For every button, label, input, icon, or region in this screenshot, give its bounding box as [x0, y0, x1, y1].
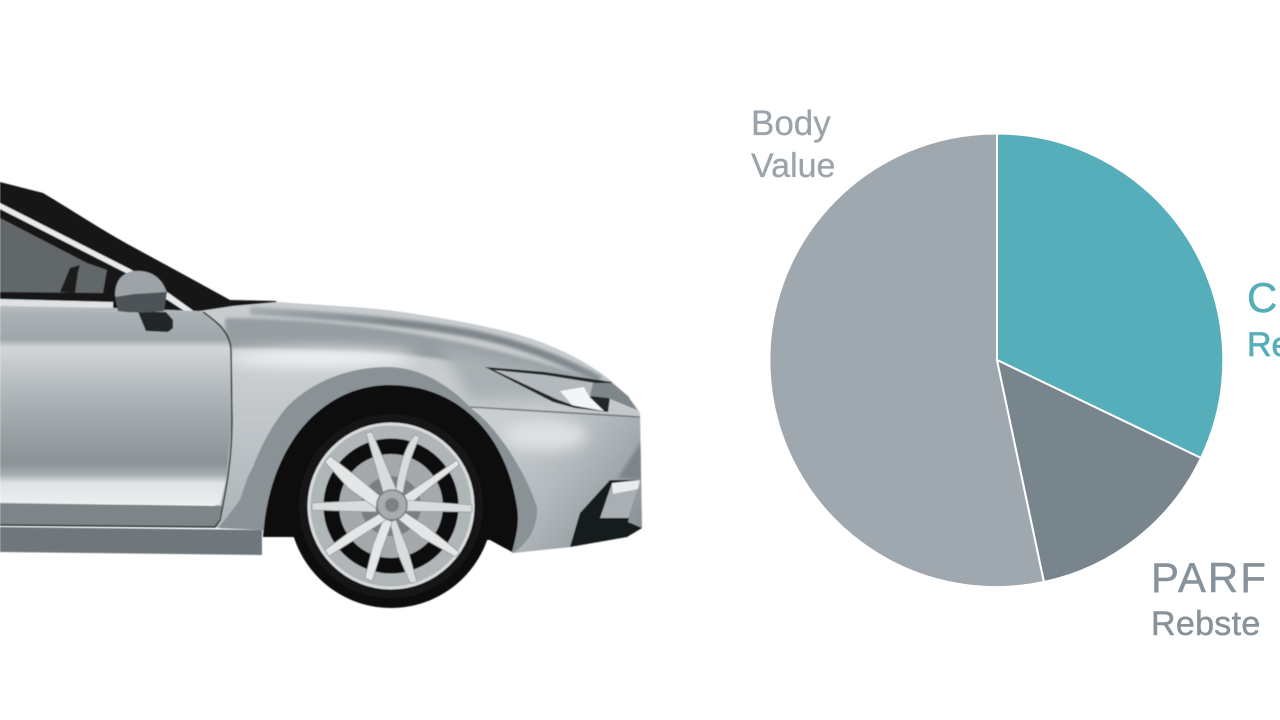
car illustration	[0, 182, 650, 608]
car: hood crease line	[470, 407, 640, 417]
car: roof and A-pillar	[0, 182, 277, 312]
label: body value: Body	[751, 104, 831, 143]
car: front wheel	[289, 404, 493, 608]
tyre	[289, 404, 493, 608]
car: fender and hood panel	[200, 295, 650, 560]
rim	[316, 431, 466, 581]
label: COE: C	[1247, 274, 1277, 321]
car: door panel	[0, 304, 232, 505]
car: headlight	[485, 367, 637, 412]
car: side window glass	[0, 218, 107, 293]
label: PARF: PARF	[1151, 554, 1268, 601]
car: window sill chrome	[0, 299, 113, 308]
car: chrome window trim	[0, 203, 195, 312]
pie slice: PARF rebate	[997, 360, 1201, 582]
car: wheel arch interior	[263, 385, 518, 552]
label: PARF rebate: Rebste	[1151, 605, 1261, 643]
wheel hub	[377, 490, 407, 520]
fender base	[200, 301, 640, 541]
car: door seam	[0, 312, 232, 527]
bumper side facet	[618, 440, 642, 480]
label: body value: Value	[751, 147, 835, 185]
spokes	[312, 432, 472, 583]
hood front shading	[445, 348, 599, 402]
car: side mirror	[115, 271, 173, 332]
hood dark band	[250, 311, 600, 380]
car: door lower strip	[0, 503, 222, 527]
car: lower air intake	[570, 480, 642, 547]
bumper	[482, 410, 642, 550]
pie slice: body value	[769, 133, 1044, 587]
bumper highlight	[503, 419, 587, 451]
car: seat silhouette in window	[60, 265, 80, 293]
pie chart	[769, 133, 1223, 587]
brake disc	[339, 454, 443, 558]
hood shaded zone	[224, 316, 586, 378]
wheel arch surround	[217, 367, 537, 560]
car: side sill	[0, 527, 262, 555]
pie slice: COE rebate	[997, 134, 1223, 458]
fender highlight	[225, 349, 415, 367]
